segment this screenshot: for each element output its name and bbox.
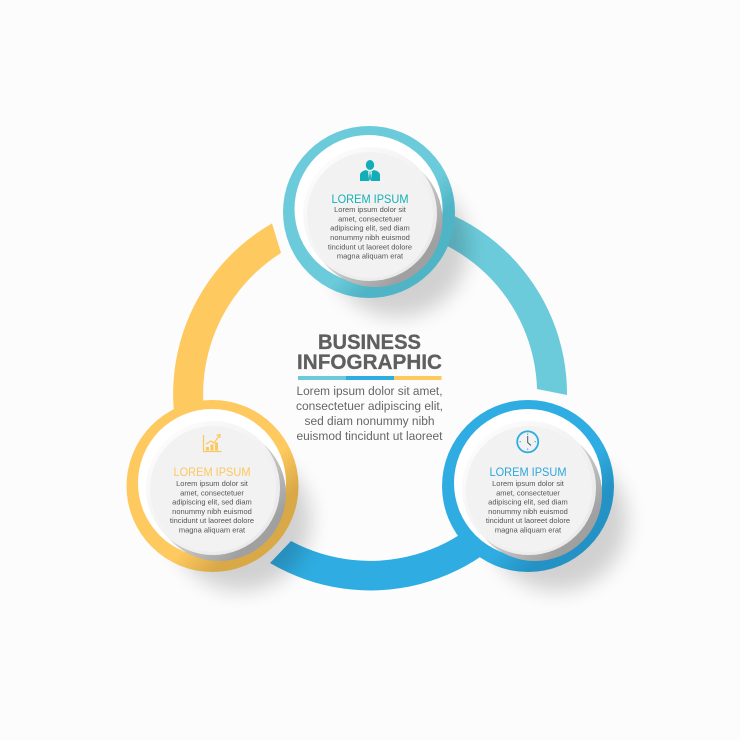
text: left body: tincidunt ut laoreet dolore	[170, 516, 254, 525]
arc: teal segment	[370, 197, 567, 395]
text: left body: Lorem ipsum dolor sit	[176, 479, 249, 488]
text: right body	[486, 479, 570, 534]
heading: left: LOREM IPSUM	[174, 465, 250, 479]
text: right body: Lorem ipsum dolor sit	[492, 479, 565, 488]
text: left body: adipiscing elit, sed diam	[172, 498, 252, 507]
text: center description: euismod tincidunt ut laoreet	[296, 429, 443, 443]
text: right body: magna aliquam erat	[495, 526, 562, 534]
text: center description: Lorem ipsum dolor sit amet,	[296, 384, 442, 398]
text: top body: Lorem ipsum dolor sit	[334, 205, 407, 214]
arc: yellow segment	[173, 223, 281, 492]
text: right body: nonummy nibh euismod	[488, 507, 568, 516]
text: left body: amet, consectetuer	[180, 488, 244, 497]
arc: blue segment	[270, 478, 541, 590]
panel: right circle	[442, 400, 627, 591]
title: BUSINESS	[318, 330, 421, 354]
text: top body: amet, consectetuer	[338, 214, 402, 223]
text: top body: tincidunt ut laoreet dolore	[328, 242, 412, 251]
heading: right: LOREM IPSUM	[490, 465, 566, 479]
text: top body: nonummy nibh euismod	[330, 233, 410, 242]
text: top body	[328, 205, 412, 261]
text: top body: magna aliquam erat	[337, 252, 404, 261]
title: INFOGRAPHIC	[297, 350, 442, 374]
panel: top circle	[283, 126, 468, 317]
icon: clock	[517, 431, 538, 452]
text: right body: adipiscing elit, sed diam	[488, 498, 568, 507]
text: center description: consectetuer adipiscing elit,	[296, 399, 443, 413]
tricolor divider	[298, 376, 442, 380]
text: left body	[170, 479, 254, 534]
icon: growth chart	[204, 434, 222, 452]
icon: person	[360, 160, 380, 181]
text: right body: tincidunt ut laoreet dolore	[486, 516, 570, 525]
heading: top: LOREM IPSUM	[332, 192, 408, 206]
title	[297, 330, 442, 374]
panel: left circle	[126, 400, 311, 591]
text: top body: adipiscing elit, sed diam	[330, 224, 410, 233]
text: left body: magna aliquam erat	[179, 526, 246, 534]
text: center description	[296, 384, 443, 443]
text: left body: nonummy nibh euismod	[172, 507, 252, 516]
text: right body: amet, consectetuer	[496, 488, 560, 497]
text: center description: sed diam nonummy nibh	[304, 414, 435, 428]
